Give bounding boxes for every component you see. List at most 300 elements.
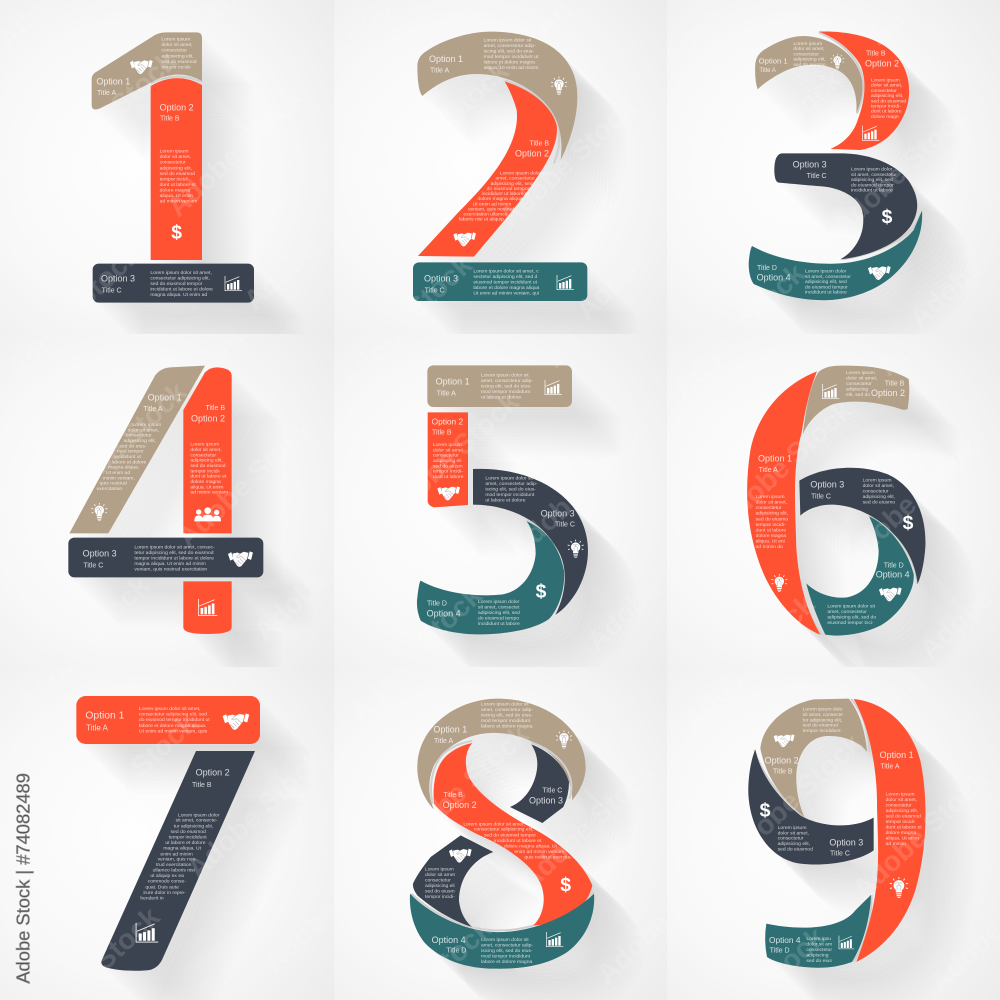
option 4 body: do eiusmod tempor <box>805 284 848 290</box>
option 4 body: sit amet, consectet <box>478 604 520 610</box>
option 2 body: dolor sit amet, <box>190 447 222 453</box>
watermark <box>334 323 667 657</box>
option 2 body: magna aliqua. Ut <box>163 846 202 852</box>
segment: option 1 <box>755 36 862 113</box>
option 1 body: labore et dolore magna <box>484 60 535 66</box>
option 3 body: Lorem ipsum <box>863 477 891 483</box>
watermark: Adobe Stock <box>710 394 859 536</box>
icon: chart <box>557 275 574 290</box>
option 1 body: Lorem ipsum dolor sit amet, <box>139 706 200 712</box>
watermark <box>1 313 334 647</box>
option 3 body: do eiusmod tempor <box>851 182 894 188</box>
watermark: Ad <box>862 3 911 52</box>
segment: option 1 <box>76 696 260 744</box>
option 2 body: tur adipisicing elit, <box>174 824 213 830</box>
option 1 body: labore et dolore magna. <box>481 724 534 730</box>
option 3 heading: Option 3 <box>424 274 458 284</box>
option 2 body: tur adipisicing elit, <box>803 717 842 723</box>
icon: chart <box>546 932 563 947</box>
icon: chart <box>862 126 879 140</box>
stock id label: Adobe Stock | #74082489 <box>12 773 33 984</box>
watermark: Stock <box>733 257 812 333</box>
option 3 body: dolor sit amet, <box>778 830 809 836</box>
icon: bulb <box>551 77 567 95</box>
icon: handshake <box>453 232 476 246</box>
option 1 body: Lorem ipsum <box>886 792 914 798</box>
segment: option 1 <box>417 699 586 810</box>
option 2 body: commodo conse- <box>148 879 186 885</box>
option 1 body: Lorem ipsum <box>756 494 784 500</box>
option 2 body: aliqua. Ut enim <box>190 484 224 490</box>
option 3 body: consectetur <box>778 836 804 842</box>
option 1 body: labore et dolore <box>112 459 147 465</box>
watermark: Adobe <box>913 582 1000 666</box>
option 4 heading: Option 4 <box>427 608 461 618</box>
option 4 body: Lorem ipsum dolor sit <box>481 937 529 943</box>
icon: handshake <box>774 734 795 747</box>
option 3 body: dolor sit amet, <box>863 483 894 489</box>
option 3 body: adipisicing eli <box>425 883 455 889</box>
option 3 body: consectetur <box>425 878 451 884</box>
panel: digit 3 <box>732 32 962 334</box>
option 3 heading: Option 3 <box>810 480 844 490</box>
icon: handshake <box>223 713 249 730</box>
option 4 body: Lorem ipsum dolor <box>478 599 519 605</box>
option 2 body: Lorem ipsum dolor sit <box>500 170 548 176</box>
segment: option 2 <box>418 82 557 257</box>
option 3 body: eiusmod tempor incididunt ut <box>473 279 538 285</box>
option 2 body: tempor incididunt <box>169 834 207 840</box>
option 2 body: Lorem ipsum <box>871 77 900 83</box>
watermark: Ad <box>882 666 931 715</box>
option 1 body: adipisicing elit, <box>756 511 788 517</box>
option 1 body: dunt ut labore et <box>886 825 922 831</box>
option 2 body: dunt ut labore et <box>190 474 227 480</box>
option 3 body: labore et dolore magna aliqua <box>473 285 540 291</box>
watermark: Stock <box>78 570 156 646</box>
option 1 body: labore et dolore magna aliqua. <box>139 723 206 729</box>
option 1 body: mod tempor <box>117 449 144 455</box>
watermark: Adobe Stock <box>367 55 516 197</box>
option 3 body: Lorem ipsum dolor <box>851 167 892 173</box>
option 2 body: sed do eiusmod tempor <box>484 833 536 839</box>
watermark: Stock <box>88 901 166 977</box>
option 2 body: consectetur <box>846 381 872 387</box>
option 2 body: do eiusmod tempor <box>487 186 530 192</box>
icon: bulb <box>568 540 584 558</box>
option 2 body: consectetur <box>871 88 897 94</box>
watermark: Adobe Stock <box>847 764 995 905</box>
option 2 body: Lorem ipsum <box>846 370 875 376</box>
option 1 body: tempor incidi- <box>756 522 786 528</box>
segment: option 2 <box>434 743 592 925</box>
segment: option 3 <box>774 153 917 259</box>
watermark: Adobe Stock <box>720 727 869 869</box>
option 2 body: ullamco laboris nisi <box>153 868 195 874</box>
watermark: Adobe <box>238 233 324 317</box>
option 2 body: incididunt ut labore et <box>494 838 542 844</box>
icon: bulb <box>831 54 844 69</box>
option 4 body: adipiscing <box>806 952 829 958</box>
option 4 body: dolor sit am <box>806 941 832 947</box>
option 4 body: adipisicing elit, sed do <box>827 614 876 620</box>
segment: option 2 <box>101 751 255 971</box>
segment: option 3 <box>93 264 254 303</box>
option 3 body: sed do eiusmod <box>778 846 813 852</box>
segment: option 4 <box>806 516 914 636</box>
option 1 body: ad minim do <box>756 544 783 550</box>
watermark: Adob <box>677 664 751 737</box>
icon: chart <box>198 599 217 615</box>
option 1 body: tempor incidi- <box>886 819 916 825</box>
option 4 title: Title D <box>884 562 904 569</box>
option 2 body: Lorem ipsum <box>190 442 219 448</box>
option 1 title: Title A <box>97 90 116 97</box>
option 1 body: sed do eiusmo <box>756 516 788 522</box>
option 2 body: sit amet, consecte- <box>176 818 218 824</box>
option 2 body: Lorem ipsum <box>160 149 188 155</box>
option 1 body: ut labore et dolore <box>481 394 521 400</box>
icon: chart <box>822 384 839 399</box>
watermark: Stock <box>400 249 479 325</box>
option 3 body: tempor incidi- <box>425 894 455 900</box>
option 1 body: sed do eiusmod <box>886 814 921 820</box>
watermark: Adobe Stock <box>837 431 985 572</box>
icon: handshake <box>879 587 902 601</box>
digit 1 shape <box>92 32 254 303</box>
watermark: Adob <box>334 323 408 396</box>
option 2 body: tempor incidi- <box>871 103 901 109</box>
option 3 body: amet, consectetur adip- <box>485 481 538 487</box>
watermark: Adobe Stock <box>45 376 193 517</box>
option 1 title: Title A <box>880 763 900 770</box>
option 1 body: consectetur <box>756 505 782 511</box>
option 2 heading: Option 2 <box>515 149 549 159</box>
option 2 body: sit amet, consecte <box>803 712 843 718</box>
option 2 body: dolor sit amet, <box>871 83 902 89</box>
segment: option 1 <box>69 366 205 533</box>
option 4 heading: Option 4 <box>757 273 791 283</box>
option 4 body: Lorem ipsu <box>806 936 831 942</box>
option 2 body: laboris nisi ut aliquip <box>459 217 504 223</box>
option 2 body: sed do eiusmod <box>190 463 226 469</box>
option 2 title: Title B <box>866 51 886 58</box>
option 2 body: consectetur adipisicing elit, <box>474 827 534 833</box>
option 2 heading: Option 2 <box>443 800 477 810</box>
option 3 body: incididunt ut labore <box>851 188 893 194</box>
option 3 body: Lorem ipsum <box>425 867 454 873</box>
option 1 body: adipisicing elit, <box>793 57 826 63</box>
option 2 title: Title B <box>432 429 452 436</box>
option 1 body: tempor incidi- <box>161 64 192 70</box>
option 1 body: sed do eius- <box>119 443 147 449</box>
watermark: Adobe Stock <box>504 422 652 564</box>
watermark <box>11 644 344 979</box>
option 1 body: dolor sit amet, <box>886 797 917 803</box>
option 2 body: dolore magna aliqua. Ut <box>504 843 558 849</box>
option 4 body: isicing elit, sed do eius- <box>481 948 533 954</box>
option 2 body: tempor incidi- <box>190 468 221 474</box>
option 2 body: adipisicing elit, <box>160 165 192 171</box>
option 1 title: Title A <box>86 724 109 733</box>
option 3 body: magna aliqua. Ut enim ad minim <box>134 561 206 567</box>
option 2 title: Title B <box>885 381 905 388</box>
watermark: Adobe Stock <box>161 82 310 223</box>
panel: digit 9 <box>667 664 1000 1000</box>
option 2 body: Lorem ipsum <box>433 442 462 448</box>
option 1 title: Title A <box>143 406 163 413</box>
option 2 body: dolore magn <box>871 114 899 120</box>
option 3 body: tetur adipiscing elit, sed do eiusmod <box>134 550 214 556</box>
option 1 heading: Option 1 <box>880 750 914 760</box>
option 2 body: tempor incidi- <box>160 176 190 182</box>
option 1 body: aliqua. Ut eni <box>756 539 785 545</box>
watermark: Stock <box>743 588 822 664</box>
segment: option 4 <box>765 895 871 968</box>
option 2 body: amet, consectetur <box>495 176 535 182</box>
icon: bulb <box>91 503 107 521</box>
option 2 body: consectetur <box>433 453 459 459</box>
option 4 body: adipisicing elit, sed <box>805 279 847 285</box>
watermark: Ad <box>206 315 256 364</box>
option 3 body: iscing elit, sed do eius- <box>485 486 536 492</box>
watermark: Adobe Stock <box>55 707 203 849</box>
watermark: Adobe Stock <box>827 100 975 242</box>
option 2 body: enim ad minim <box>160 851 193 857</box>
option 1 body: adipisicing elit, <box>124 438 156 444</box>
option 3 heading: Option 3 <box>793 160 827 170</box>
option 2 body: quis nostrud exercita- <box>524 855 572 861</box>
icon: handshake <box>437 486 460 500</box>
option 2 body: dunt ut labore et <box>160 182 196 188</box>
option 1 body: aliqua. Ut enim <box>886 836 919 842</box>
segment: option 3 <box>68 538 263 577</box>
option 2 body: quat. Duis aute <box>145 885 179 891</box>
option 3 body: sit amet, consectetur <box>851 172 897 178</box>
digit 4 shape <box>68 366 263 634</box>
option 4 title: Title D <box>427 600 447 607</box>
option 1 heading: Option 1 <box>429 54 463 64</box>
watermark <box>414 64 585 301</box>
option 1 body: isicing elit, sed do eius- <box>481 713 533 719</box>
watermark <box>344 656 677 990</box>
digit 9 shape <box>748 699 926 968</box>
option 1 body: Lorem ipsum <box>161 37 190 43</box>
digit 8 shape <box>410 699 594 969</box>
option 2 body: adipisicing elit, sed <box>491 181 533 187</box>
segment: option 1 <box>417 32 577 160</box>
segment: option 2 <box>760 699 867 817</box>
option 2 heading: Option 2 <box>191 413 225 423</box>
icon: people <box>194 507 221 521</box>
watermark: Stock <box>410 580 489 656</box>
option 1 body: dolore magna <box>756 533 786 539</box>
option 2 body: ad minim veniam <box>190 490 228 496</box>
option 2 body: henderit in <box>140 895 164 901</box>
icon: dollar: $ <box>903 513 914 534</box>
option 1 heading: Option 1 <box>758 453 792 463</box>
watermark: Stock <box>420 913 499 989</box>
option 2 body: dolor sit amet, <box>846 375 877 381</box>
option 2 body: tempor incidi- <box>433 469 463 475</box>
option 1 body: dunt ut labore <box>756 527 786 533</box>
option 2 title: Title B <box>529 140 549 147</box>
option 3 body: magna aliqua. Ut enim ad <box>150 292 207 298</box>
option 1 body: consectetur <box>793 51 819 57</box>
option 3 body: Ut enim ad minim veniam, qui <box>473 290 539 296</box>
option 2 title: Title B <box>192 782 212 789</box>
option 1 body: consectetur adipiscing elit, sed <box>139 712 207 718</box>
option 4 body: incididunt ut labore <box>478 621 520 627</box>
option 3 body: Lorem ipsum dolor sit amet, c <box>473 268 539 274</box>
option 2 title: Title B <box>773 768 793 775</box>
watermark: Adob <box>667 331 741 404</box>
option 2 body: ut labore et dolore <box>165 840 206 846</box>
option 3 body: Lorem ipsum <box>778 825 806 831</box>
segment: option 1 <box>747 371 820 635</box>
option 1 body: dolore magna <box>886 830 916 836</box>
watermark <box>677 664 1000 999</box>
option 1 body: dolor sit amet, <box>756 500 787 506</box>
option 3 body: adipisicing elit, sed <box>851 177 893 183</box>
panel: digit 5 <box>334 323 668 668</box>
panel: digit 4 <box>0 313 334 668</box>
option 1 heading: Option 1 <box>759 57 788 66</box>
option 3 body: Lorem ipsum dolor sit amet, consec- <box>134 545 215 551</box>
option 1 body: magna aliqua. <box>108 465 139 471</box>
panel: digit 7 <box>0 644 344 1000</box>
icon: chart <box>839 936 854 949</box>
option 1 body: adipisicing elit, <box>886 808 918 814</box>
option 4 title: Title D <box>446 948 466 955</box>
icon: dollar: $ <box>171 223 182 244</box>
option 3 body: tempor incididunt ut labore et dolore <box>134 556 214 562</box>
option 3 body: sed do eiusmod tempor <box>150 281 203 287</box>
segment: option 2 <box>819 32 909 150</box>
option 1 body: Lorem ipsum dolor sit <box>484 38 531 44</box>
option 2 heading: Option 2 <box>196 768 230 778</box>
segment: option 2 upper <box>183 367 232 533</box>
option 3 heading: Option 3 <box>101 274 135 284</box>
icon: bulb <box>771 574 787 592</box>
option 1 body: consectetur <box>886 803 912 809</box>
digit 7 shape <box>76 696 260 971</box>
segment: option 4 <box>749 211 922 300</box>
watermark: Adobe <box>590 907 677 990</box>
option 1 body: amet, consectetur adip- <box>484 43 536 49</box>
option 3 body: incididunt ut labore et dolore <box>150 287 213 293</box>
option 3 body: Lorem ipsum dolor sit <box>485 475 533 481</box>
option 4 body: sit amet, consectetur <box>805 274 851 280</box>
option 1 body: minim veniam, <box>103 475 135 481</box>
segment: option 2 <box>803 366 909 434</box>
option 2 body: trud exercitation <box>156 862 192 868</box>
segment: option 4 <box>410 894 594 969</box>
option 1 body: quis nostrud <box>100 481 127 487</box>
option 3 title: Title C <box>425 287 445 294</box>
digit 3 shape <box>749 32 922 300</box>
option 3 heading: Option 3 <box>829 837 863 847</box>
segment: option 3 lower <box>413 835 493 927</box>
option 4 body: Lorem ipsum dolor <box>805 269 846 275</box>
watermark: Adob <box>657 1 731 73</box>
option 2 body: incididunt ut labore et <box>482 191 530 197</box>
option 2 body: aliqua. Ut enim <box>160 193 193 199</box>
option 2 body: dolore magna <box>190 479 221 485</box>
watermark: Adob <box>1 313 76 386</box>
watermark: Adobe Stock <box>171 412 320 554</box>
option 4 heading: Option 4 <box>769 935 801 945</box>
option 2 heading: Option 2 <box>871 388 905 398</box>
icon: bulb <box>890 877 908 898</box>
watermark: Adobe Stock <box>700 63 849 205</box>
option 1 heading: Option 1 <box>148 393 182 403</box>
option 4 body: eiusmod tempor inci- <box>827 620 874 626</box>
icon: dollar: $ <box>536 581 547 602</box>
digit 5 shape <box>417 365 588 634</box>
option 3 title: Title C <box>102 287 122 294</box>
option 2 title: Title B <box>205 405 225 412</box>
option 2 body: dunt ut labore <box>433 474 464 480</box>
option 3 body: sectetur adipiscing elit, sed d <box>473 274 538 280</box>
option 2 heading: Option 2 <box>432 417 464 427</box>
watermark: Adobe <box>580 574 667 657</box>
watermark <box>667 331 1000 666</box>
option 1 body: mod tempor incididunt <box>481 718 531 724</box>
option 1 body: exercitation <box>97 486 122 492</box>
option 3 body: adipisicing elit, <box>778 841 810 847</box>
option 3 body: ut labore et dolore <box>485 497 526 503</box>
option 1 body: Lorem ipsum <box>793 41 822 47</box>
option 2 body: Lorem ipsum dolor sit amet, <box>463 821 525 827</box>
option 3 body: Lorem ipsum dolor sit amet, <box>150 270 212 276</box>
watermark <box>92 53 254 302</box>
panel: digit 6 <box>667 331 1000 668</box>
icon: chart <box>225 276 242 291</box>
option 1 body: Ut enim ad minim veniam, quis <box>139 728 208 734</box>
option 2 body: dolore magna <box>160 187 190 193</box>
option 2 body: tempor incididunt <box>803 728 841 734</box>
segment: option 3 <box>473 469 588 615</box>
watermark: Ad <box>216 646 266 695</box>
option 4 body: mod tempor incididunt <box>481 953 531 959</box>
option 2 heading: Option 2 <box>865 59 899 69</box>
watermark: Adobe Stock <box>35 45 183 187</box>
option 2 body: ut aliquip ex ea <box>150 873 184 879</box>
option 2 body: elit, sed do <box>846 392 870 398</box>
option 2 body: Lorem ipsum dolo <box>803 707 842 713</box>
segment: option 3 <box>413 262 587 301</box>
option 3 body: veniam, quis nostrud exercitation <box>134 567 207 573</box>
option 4 body: adipisicing elit, sed <box>478 610 520 616</box>
watermark: Adob <box>11 644 86 717</box>
option 3 title: Title C <box>830 851 850 858</box>
option 1 body: sed do eiusmod <box>161 59 197 65</box>
icon: handshake <box>868 266 891 280</box>
option 2 body: enim ad minim veniam, <box>514 849 566 855</box>
option 3 body: sed do eiusm <box>425 889 455 895</box>
option 2 body: adipisicing elit, <box>190 458 223 464</box>
option 1 body: dolor sit amet, <box>793 46 825 52</box>
icon: handshake <box>449 849 472 863</box>
watermark: Adobe Stock <box>387 719 536 860</box>
option 4 body: consectetur <box>806 947 832 953</box>
option 2 body: adipisicing elit, <box>871 93 903 99</box>
option 3 body: adipisicing elit, <box>863 494 895 500</box>
icon: handshake <box>228 551 253 567</box>
watermark: Adob <box>344 656 418 729</box>
option 4 body: amet, consectetur <box>827 609 867 615</box>
